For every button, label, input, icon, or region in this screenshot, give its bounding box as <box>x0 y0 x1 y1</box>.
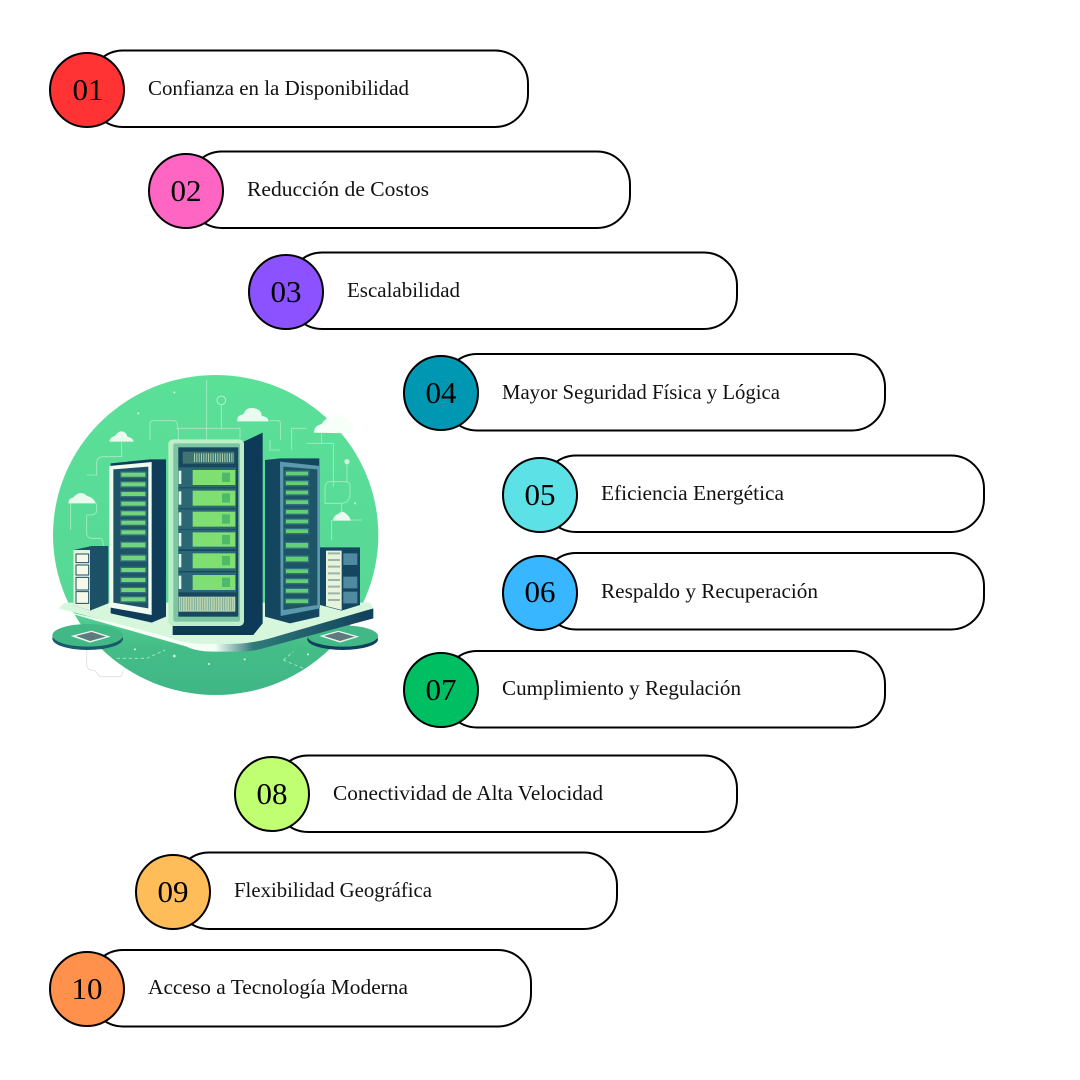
small left server <box>73 546 108 611</box>
item 08: Conectividad de Alta Velocidad <box>333 781 603 805</box>
small right server <box>320 547 360 611</box>
item 10 <box>50 950 531 1026</box>
item 09 <box>136 852 617 929</box>
item 08: 08 <box>256 776 288 811</box>
item 03 <box>249 252 737 329</box>
right rack <box>265 458 320 623</box>
left disc <box>52 624 123 650</box>
item 02: Reducción de Costos <box>247 177 429 201</box>
illustration: data center servers <box>52 375 378 695</box>
item 05: 05 <box>524 477 556 512</box>
clouds <box>68 408 353 521</box>
item 01: Confianza en la Disponibilidad <box>148 76 409 100</box>
item 05 <box>503 456 984 532</box>
item 06: 06 <box>524 574 556 609</box>
item 07: 07 <box>426 672 456 707</box>
central rack <box>168 433 263 635</box>
left rack <box>109 459 166 623</box>
item 06 <box>503 553 984 630</box>
item 10: Acceso a Tecnología Moderna <box>148 975 408 999</box>
item 07: Cumplimiento y Regulación <box>502 676 741 700</box>
item 01: 01 <box>72 72 104 107</box>
item 09: Flexibilidad Geográfica <box>234 878 432 902</box>
item 02: 02 <box>170 173 202 208</box>
item 04: Mayor Seguridad Física y Lógica <box>502 380 780 404</box>
item 10: 10 <box>72 971 102 1006</box>
item 03: Escalabilidad <box>347 278 460 302</box>
item 01 <box>50 50 528 127</box>
circuit lines <box>71 380 362 668</box>
item 04: 04 <box>426 375 457 410</box>
item 03: 03 <box>270 274 302 309</box>
item 06: Respaldo y Recuperación <box>601 579 818 603</box>
item 05: Eficiencia Energética <box>601 481 784 505</box>
item 08 <box>235 756 737 832</box>
item 04 <box>404 354 885 430</box>
item 07 <box>404 651 885 728</box>
item 09: 09 <box>158 874 188 909</box>
green background circle <box>53 375 378 695</box>
platform <box>57 603 373 652</box>
item 02 <box>149 152 630 228</box>
right disc <box>307 625 378 650</box>
